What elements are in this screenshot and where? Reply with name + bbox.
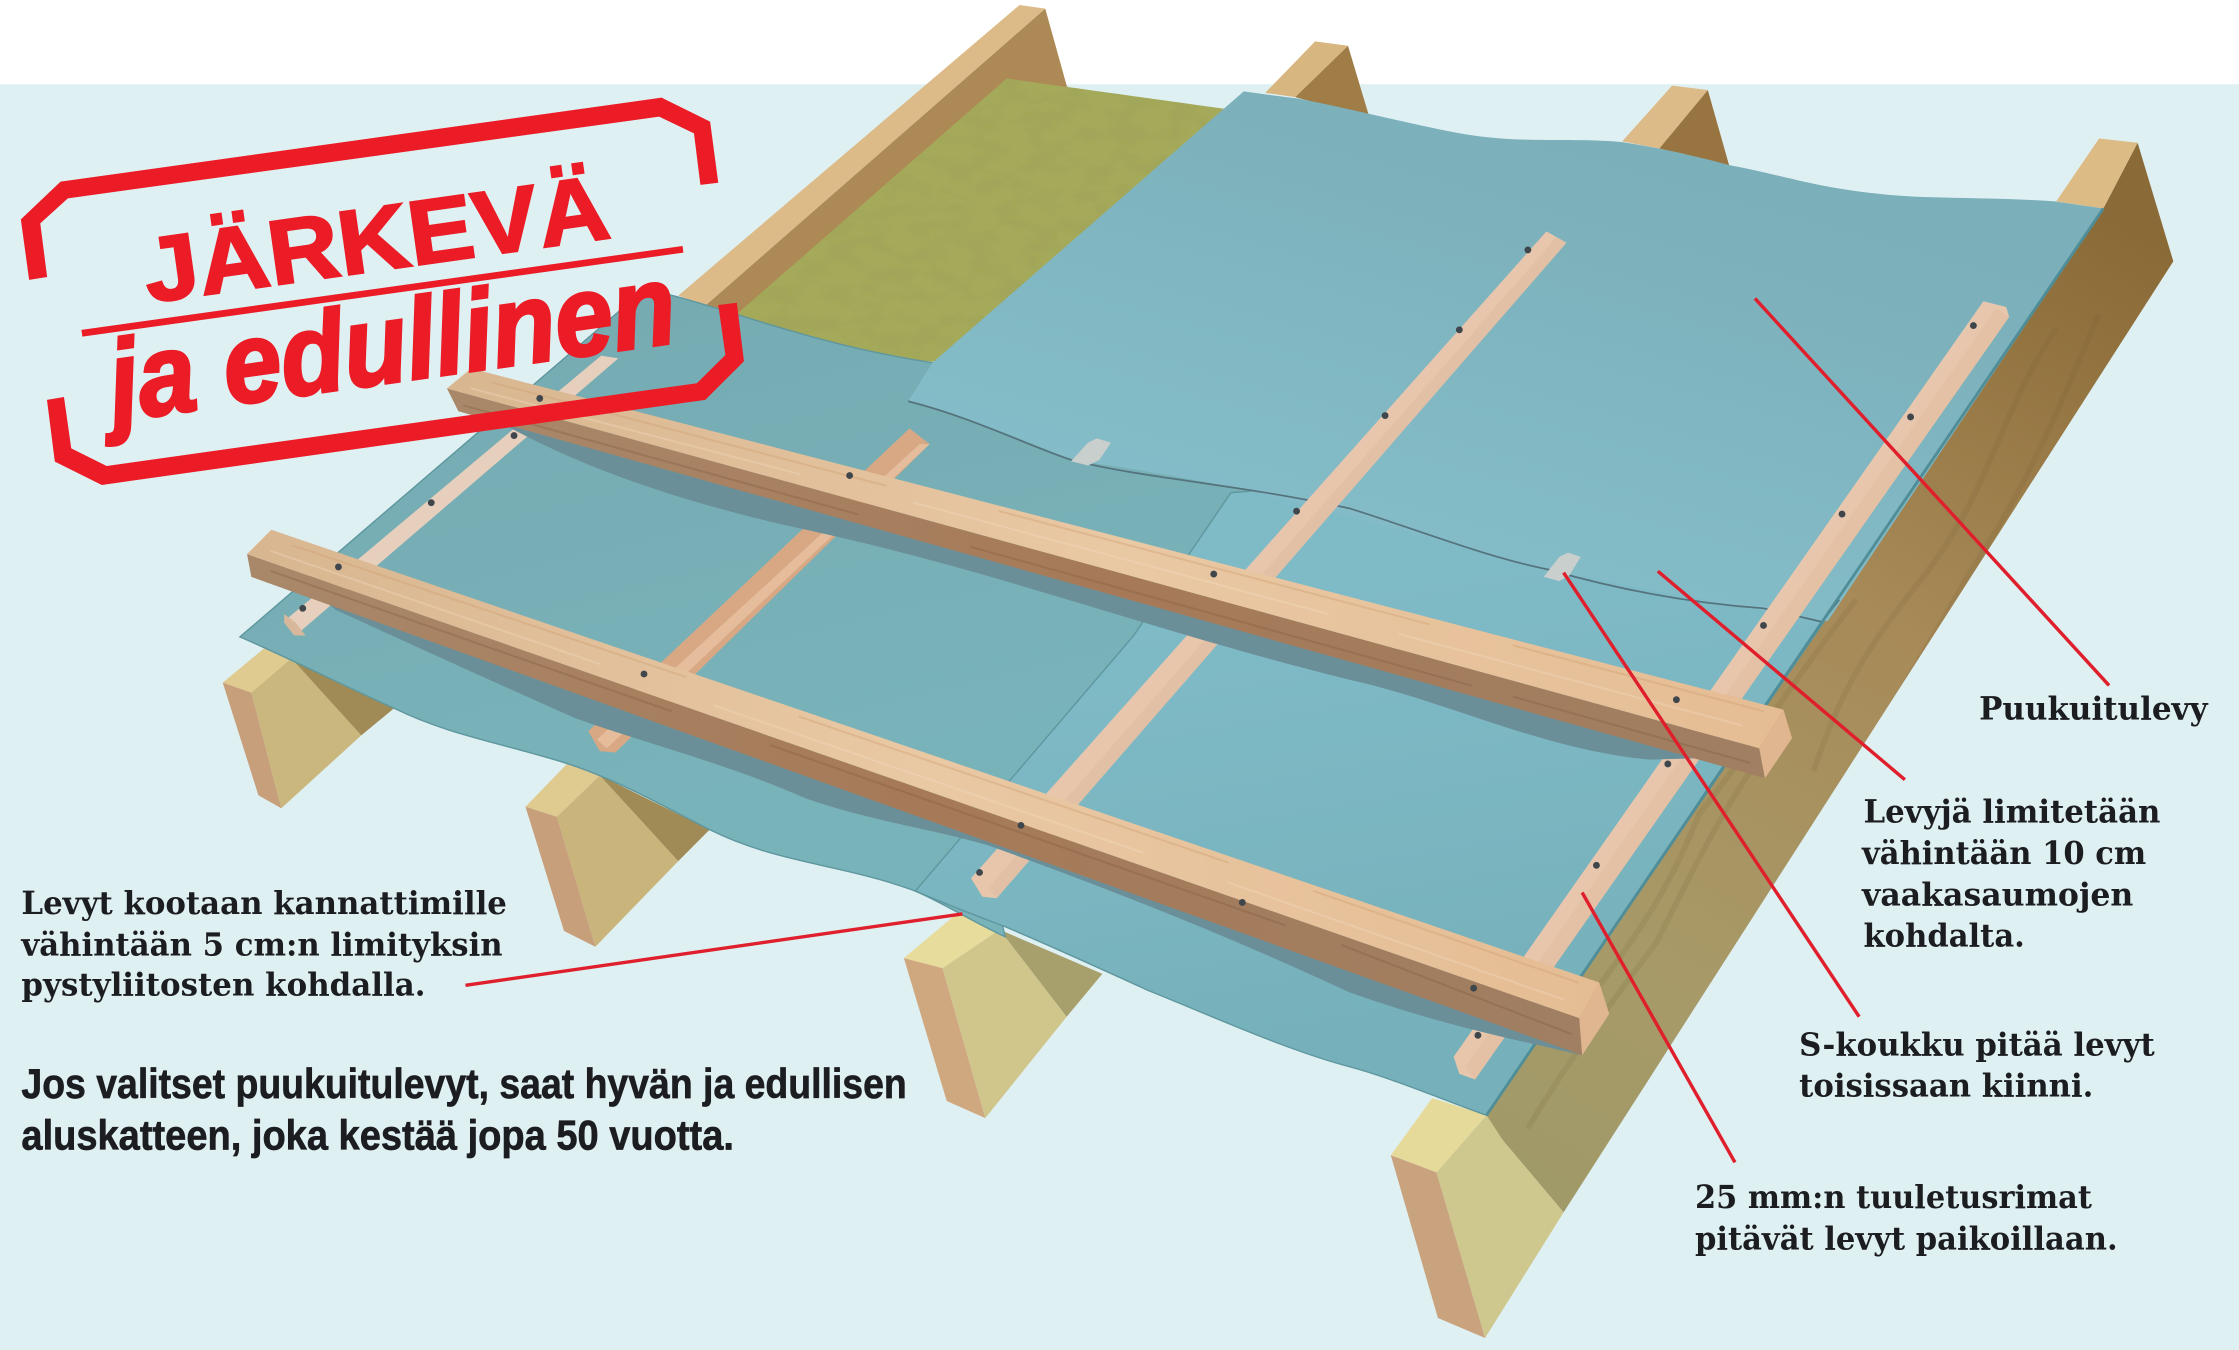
label: S-koukku: toisissaan kiinni. bbox=[1799, 1069, 2093, 1105]
S-hook right bbox=[1544, 553, 1581, 581]
sheet edge thickness bbox=[1486, 208, 2103, 1115]
leader: Levyjä limitetään bbox=[1658, 571, 1905, 780]
label: 25 mm tuuletusrimat bbox=[1695, 1180, 2118, 1257]
label: 25 mm tuuletusrimat: pitävät levyt paikoillaan. bbox=[1695, 1221, 2118, 1257]
leader: Puukuitulevy bbox=[1755, 298, 2109, 685]
upper beam grain bbox=[464, 383, 1763, 763]
shadow of upper beam bbox=[485, 414, 1742, 760]
sheet seam line bbox=[908, 401, 1839, 622]
label: Levyjä limitetään: kohdalta. bbox=[1863, 919, 2025, 955]
batten A bbox=[284, 356, 618, 635]
insulation bbox=[737, 79, 1264, 363]
sheet: upper board bbox=[908, 91, 2103, 621]
lead text: aluskatteen, joka kestää jopa 50 vuotta. bbox=[21, 1113, 734, 1159]
label: Levyt kootaan: Levyt kootaan kannattimille bbox=[21, 886, 507, 922]
leader: Levyt kootaan bbox=[466, 914, 962, 985]
lower beam grain bbox=[271, 545, 1578, 1034]
label: Puukuitulevy: Puukuitulevy bbox=[1979, 692, 2208, 728]
sheet: lower left board bbox=[240, 290, 1428, 937]
rafter 1 bbox=[223, 5, 1085, 808]
stamp lower bracket bbox=[47, 303, 744, 485]
wood grain on rafter 4 bbox=[1526, 586, 1966, 1130]
label: Levyjä limitetään: Levyjä limitetään bbox=[1863, 795, 2161, 831]
stamp divider bbox=[81, 246, 683, 337]
lead text bbox=[21, 1061, 907, 1159]
label: Levyt kootaan: pystyliitosten kohdalla. bbox=[21, 967, 426, 1003]
batten B bbox=[588, 428, 930, 753]
stamp words: ja edullinen: ja edullinen bbox=[88, 241, 683, 448]
upper cross beam bbox=[447, 368, 1792, 778]
label: S-koukku bbox=[1799, 1027, 2155, 1105]
rafter 4 bbox=[1391, 139, 2173, 1338]
stamp word: JÄRKEVÄ: JÄRKEVÄ bbox=[137, 156, 615, 323]
label: Levyjä limitetään bbox=[1861, 795, 2161, 955]
leader: tuuletusrimat bbox=[1582, 892, 1735, 1162]
S-hook left bbox=[1071, 438, 1111, 466]
label: Levyt kootaan: vähintään 5 cm:n limityksin bbox=[20, 927, 503, 963]
batten C bbox=[971, 231, 1566, 898]
label: S-koukku: S-koukku pitää levyt bbox=[1799, 1027, 2155, 1063]
label: Levyjä limitetään: vaakasaumojen bbox=[1861, 877, 2133, 913]
sheet: lower right board bbox=[915, 478, 1829, 1115]
batten D bbox=[1454, 301, 2009, 1080]
lead text: Jos valitset puukuitulevyt, saat hyvän ja edullisen bbox=[21, 1061, 907, 1107]
stamp upper bracket bbox=[21, 98, 718, 280]
label: 25 mm tuuletusrimat: 25 mm:n tuuletusrimat bbox=[1695, 1180, 2092, 1216]
label: Levyjä limitetään: vähintään 10 cm bbox=[1861, 836, 2146, 872]
leader: S-koukku bbox=[1564, 573, 1859, 1017]
lower cross beam bbox=[247, 530, 1609, 1055]
leader lines bbox=[466, 298, 2109, 1162]
rafter 2 bbox=[525, 41, 1369, 947]
shadow of lower beam bbox=[286, 571, 1582, 1055]
label: Levyt kootaan bbox=[20, 886, 507, 1003]
rafter 3 bbox=[904, 86, 1729, 1118]
stamp: Järkevä ja edullinen bbox=[21, 98, 744, 485]
